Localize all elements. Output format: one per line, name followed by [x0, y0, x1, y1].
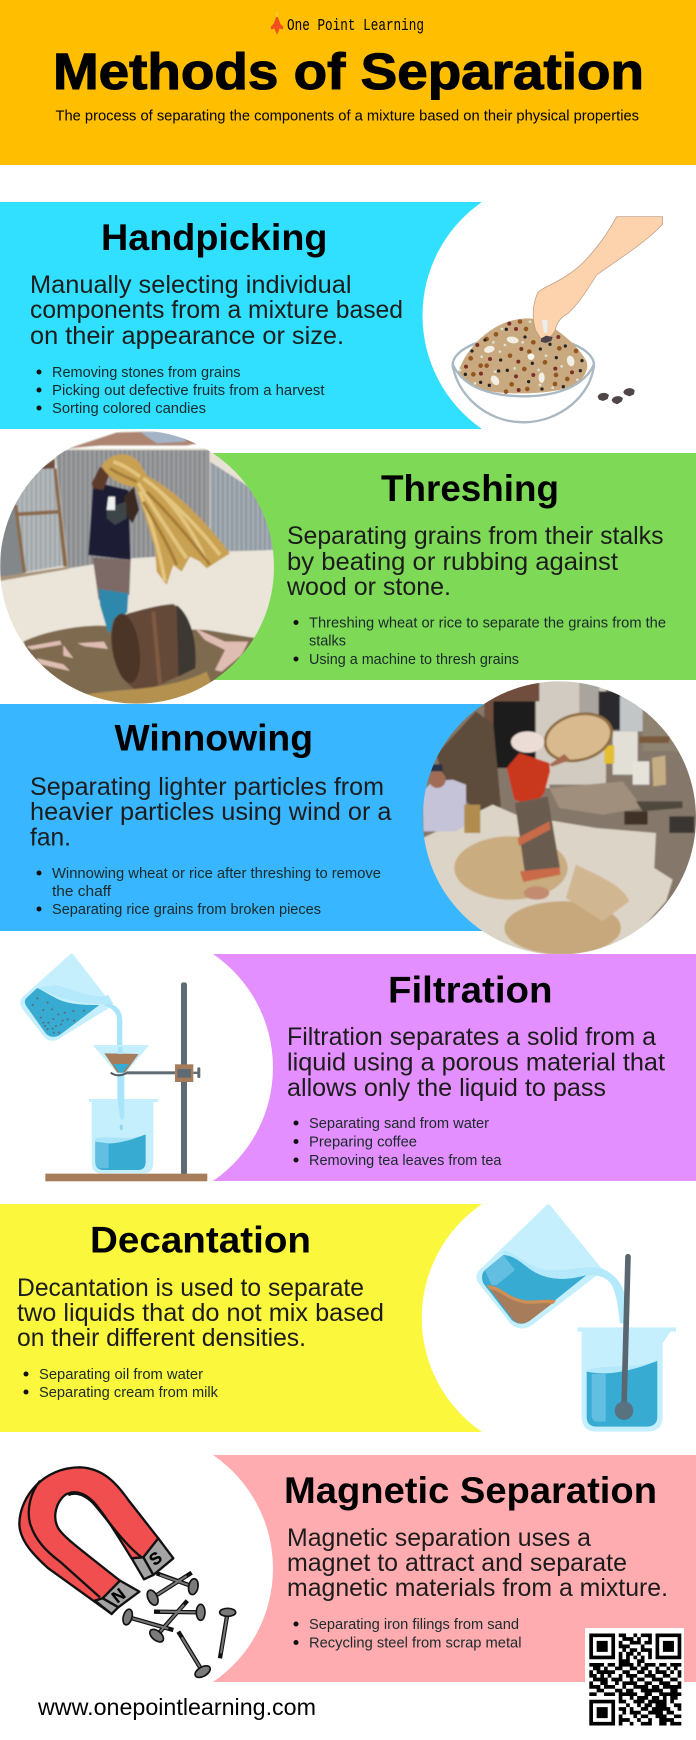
- title: Methods of Separation: [53, 43, 644, 100]
- magnet: [19, 1467, 173, 1614]
- examples: winnowing: Separating rice grains from broken pieces: [52, 902, 321, 918]
- description: winnowing: heavier particles using wind or a: [30, 798, 392, 826]
- panel: magnetic separation: [19, 1455, 696, 1682]
- examples: decantation: Separating cream from milk: [39, 1385, 219, 1401]
- examples: handpicking: Sorting colored candies: [52, 401, 206, 417]
- panel: winnowing: [0, 678, 696, 955]
- icon: hand picking stones from bowl of grains: [453, 217, 663, 422]
- description: magnetic separation: magnetic materials from a mixture.: [287, 1574, 668, 1602]
- pouring beaker: [22, 956, 122, 1047]
- pole letter S: S: [145, 1548, 166, 1570]
- heading: Decantation: Decantation: [90, 1220, 311, 1260]
- QR code: [585, 1628, 684, 1725]
- description: decantation: on their different densities.: [17, 1324, 306, 1352]
- panel: filtration: [22, 954, 696, 1181]
- examples: threshing: stalks: [309, 634, 346, 650]
- heading: Winnowing: Winnowing: [114, 718, 313, 758]
- icon: horseshoe magnet attracting nails: [19, 1467, 236, 1680]
- examples: decantation: [24, 1367, 219, 1401]
- examples: handpicking: Picking out defective fruits from a harvest: [52, 383, 324, 399]
- examples: filtration: Removing tea leaves from tea: [309, 1153, 502, 1169]
- description: threshing: wood or stone.: [286, 573, 451, 601]
- subtitle: The process of separating the components of a mixture based on their physical properties: [56, 108, 639, 124]
- logo: One Point Learning: [270, 12, 424, 35]
- examples: decantation: Separating oil from water: [39, 1367, 203, 1383]
- description: magnetic separation: magnet to attract and separate: [287, 1549, 627, 1577]
- examples: winnowing: Winnowing wheat or rice after threshing to remove: [52, 866, 381, 882]
- heading: Magnetic Separation: Magnetic Separation: [284, 1470, 657, 1511]
- photo: woman winnowing grain: [416, 678, 696, 955]
- description: threshing: by beating or rubbing against: [287, 548, 618, 576]
- examples: handpicking: Removing stones from grains: [52, 365, 240, 381]
- description: handpicking: Manually selecting individual: [30, 271, 352, 299]
- examples: winnowing: [36, 866, 381, 918]
- stand rod and base: [45, 982, 207, 1181]
- nails: [121, 1573, 236, 1680]
- description: winnowing: fan.: [30, 824, 71, 852]
- footer website: www.onepointlearning.com: [37, 1694, 316, 1720]
- icon: decanting liquid along a rod: [479, 1207, 676, 1432]
- description: winnowing: [30, 773, 392, 852]
- examples: filtration: [294, 1116, 502, 1169]
- description: decantation: Decantation is used to separate: [17, 1274, 364, 1302]
- heading: Filtration: Filtration: [388, 970, 552, 1010]
- examples: filtration: Preparing coffee: [309, 1134, 417, 1150]
- icon: filtration apparatus: [22, 956, 207, 1181]
- examples: winnowing: the chaff: [52, 884, 112, 900]
- description: decantation: [17, 1274, 384, 1352]
- panel: handpicking: [0, 202, 663, 429]
- examples: handpicking: [36, 365, 324, 417]
- funnel with filter paper: [93, 1045, 200, 1117]
- examples: magnetic separation: [294, 1617, 522, 1652]
- receiving beaker: [577, 1327, 676, 1432]
- description: threshing: Separating grains from their stalks: [287, 522, 664, 550]
- receiving beaker: [89, 1099, 158, 1173]
- examples: threshing: [294, 616, 666, 668]
- description: threshing: [286, 522, 664, 601]
- photo: man threshing grain: [0, 425, 280, 712]
- heading: Threshing: Threshing: [381, 468, 559, 509]
- description: filtration: allows only the liquid to pass: [287, 1074, 606, 1102]
- examples: magnetic separation: Recycling steel from scrap metal: [309, 1636, 522, 1652]
- description: decantation: two liquids that do not mix based: [17, 1299, 384, 1327]
- pouring beaker: [479, 1207, 625, 1326]
- description: magnetic separation: [287, 1524, 668, 1602]
- pole letter N: N: [108, 1584, 129, 1607]
- description: handpicking: components from a mixture based: [30, 296, 403, 324]
- description: magnetic separation: Magnetic separation uses a: [287, 1524, 591, 1552]
- description: handpicking: [30, 271, 403, 350]
- examples: threshing: Using a machine to thresh grains: [309, 652, 519, 668]
- examples: filtration: Separating sand from water: [309, 1116, 489, 1132]
- examples: magnetic separation: Separating iron filings from sand: [309, 1617, 519, 1633]
- panel: threshing: [0, 425, 696, 712]
- glass rod: [615, 1257, 633, 1420]
- header banner: [0, 0, 696, 165]
- heading: Handpicking: Handpicking: [101, 217, 328, 258]
- panel: decantation: [0, 1204, 676, 1432]
- examples: threshing: Threshing wheat or rice to separate the grains from the: [309, 616, 666, 632]
- description: winnowing: Separating lighter particles from: [30, 773, 384, 801]
- description: handpicking: on their appearance or size.: [30, 322, 344, 350]
- description: filtration: [287, 1023, 665, 1102]
- description: filtration: Filtration separates a solid from a: [287, 1023, 656, 1051]
- logo: One Point Learning: One Point Learning: [287, 16, 424, 35]
- description: filtration: liquid using a porous material that: [287, 1048, 665, 1076]
